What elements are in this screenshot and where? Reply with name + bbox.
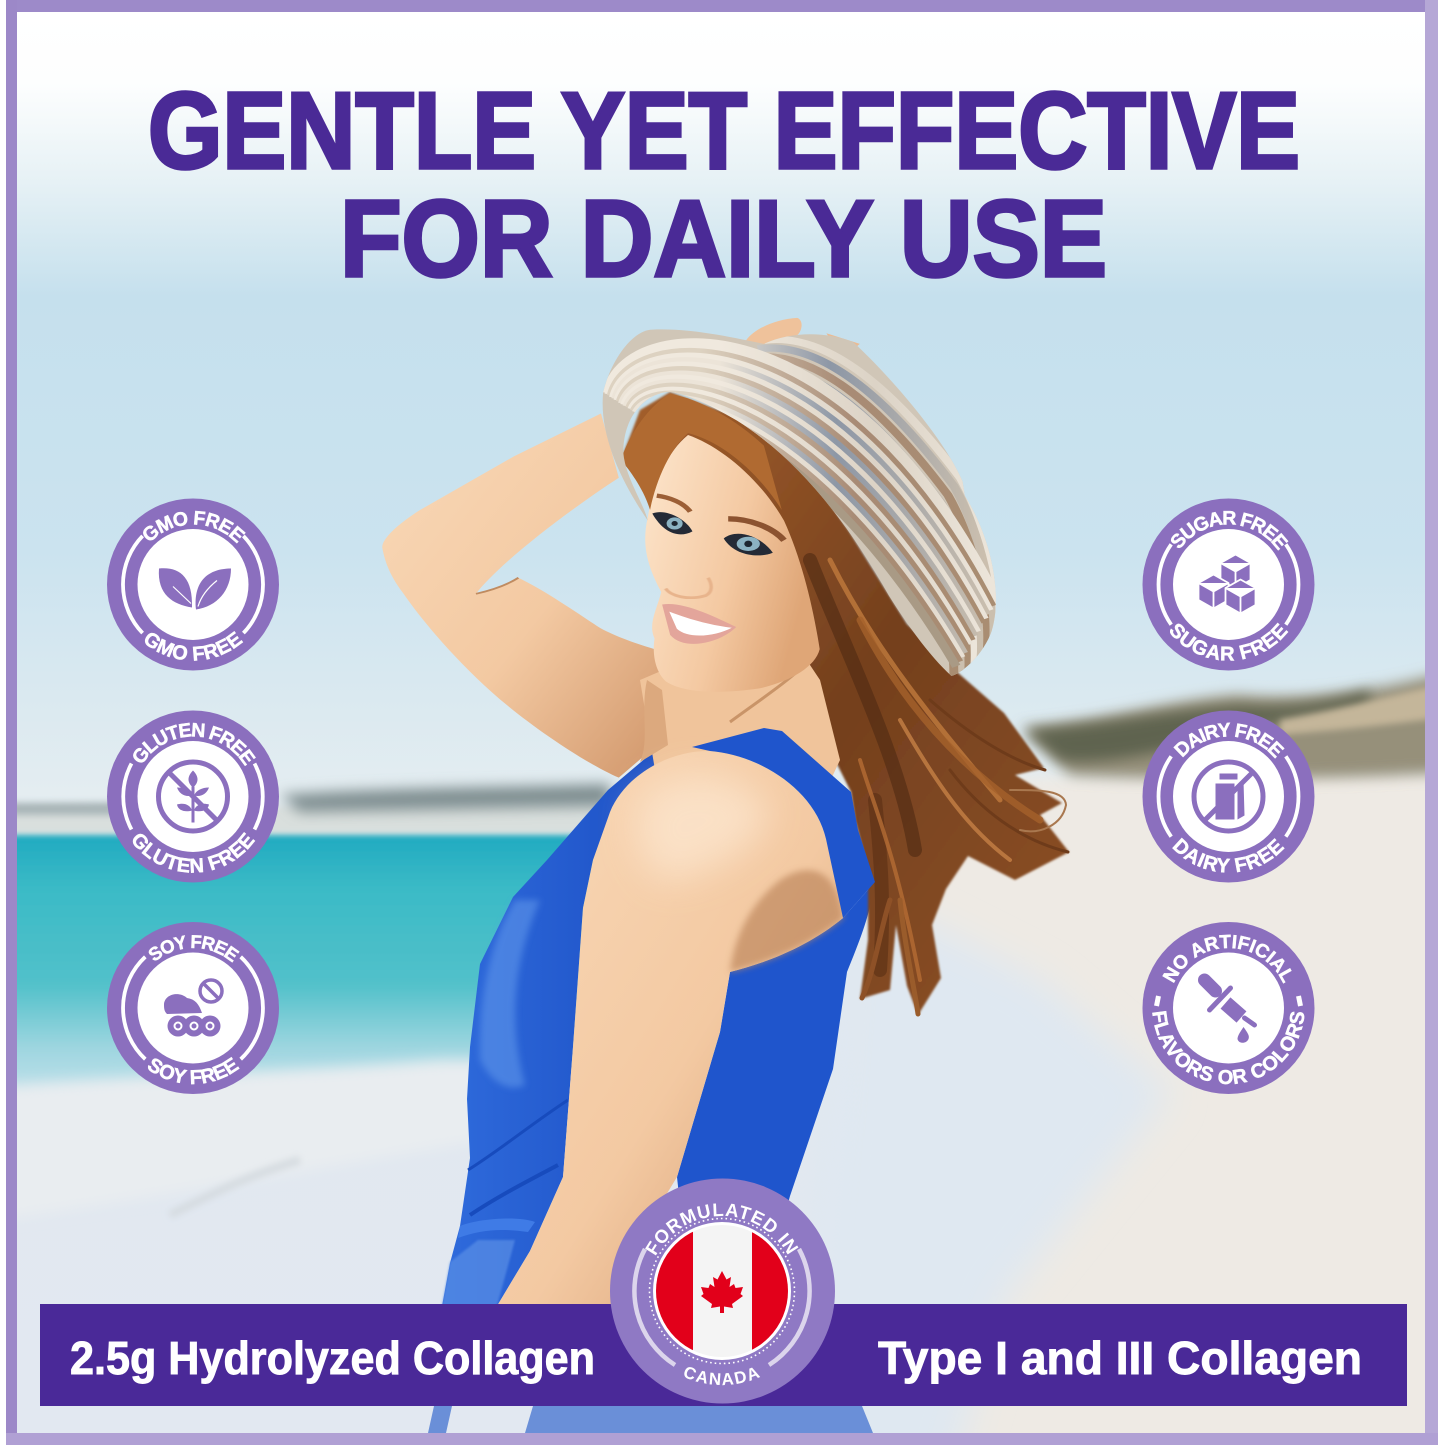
badge: soy free: SOY FREE [148, 1057, 240, 1084]
badge: sugar free: SUGAR FREE [1170, 622, 1288, 661]
dress strap [692, 728, 875, 918]
icon: soybeans [164, 980, 222, 1036]
title: FOR DAILY USE [340, 178, 1107, 300]
back of dress [677, 882, 875, 1296]
bottom band [40, 1304, 1407, 1406]
neck [640, 620, 840, 790]
badge: gluten free: GLUTEN FREE [133, 722, 256, 766]
badge: formulated in Canada: CANADA [684, 1367, 760, 1386]
badge: sugar free [1142, 498, 1314, 670]
badge: soy free [107, 922, 279, 1094]
badge: GMO free [107, 498, 279, 670]
icon: sugar cubes [1198, 554, 1256, 614]
hat [603, 329, 998, 691]
badge: formulated in Canada [610, 1178, 835, 1404]
badge: no artificial flavors or colors: FLAVORS OR COLORS [1152, 1010, 1304, 1084]
icon: leaves [159, 568, 231, 610]
badge: GMO free: GMO FREE [143, 510, 246, 544]
hair strands [810, 560, 1068, 1014]
badge: GMO free: GMO FREE [144, 631, 244, 661]
upper arm and shoulder [497, 751, 843, 1306]
badge: dairy free: DAIRY FREE [1173, 722, 1284, 759]
band text: left: 2.5g Hydrolyzed Collagen [70, 1332, 595, 1384]
Canadian flag [656, 1225, 788, 1357]
dress highlights [442, 900, 568, 1306]
badge: dairy free: DAIRY FREE [1172, 838, 1285, 873]
raised arm [382, 318, 860, 778]
hair mass [621, 392, 1069, 1015]
woman photo figure [382, 318, 1069, 1433]
eyes [652, 496, 784, 555]
badge: gluten free [107, 710, 279, 882]
band text: right: Type I and III Collagen [878, 1332, 1362, 1384]
badge: dairy free [1142, 710, 1314, 882]
badge: soy free: SOY FREE [148, 935, 240, 963]
title: GENTLE YET EFFECTIVE [148, 70, 1300, 192]
badge: gluten free: GLUTEN FREE [132, 832, 256, 873]
skirt below the band [428, 1406, 873, 1433]
nose [666, 578, 711, 598]
badge: sugar free: SUGAR FREE [1170, 510, 1288, 551]
badge: formulated in Canada: FORMULATED IN [645, 1204, 798, 1256]
badge: no artificial flavors or colors: NO ARTIFICIAL [1162, 934, 1292, 984]
icon: crossed wheat [158, 762, 228, 831]
badge: no artificial flavors or colors [1142, 922, 1314, 1094]
smile [662, 604, 736, 644]
icon: crossed milk carton [1194, 762, 1263, 831]
hair front lock [621, 394, 782, 510]
icon: dropper [1204, 980, 1254, 1043]
front of dress [442, 740, 667, 1306]
title [148, 70, 1300, 300]
face [603, 329, 998, 692]
